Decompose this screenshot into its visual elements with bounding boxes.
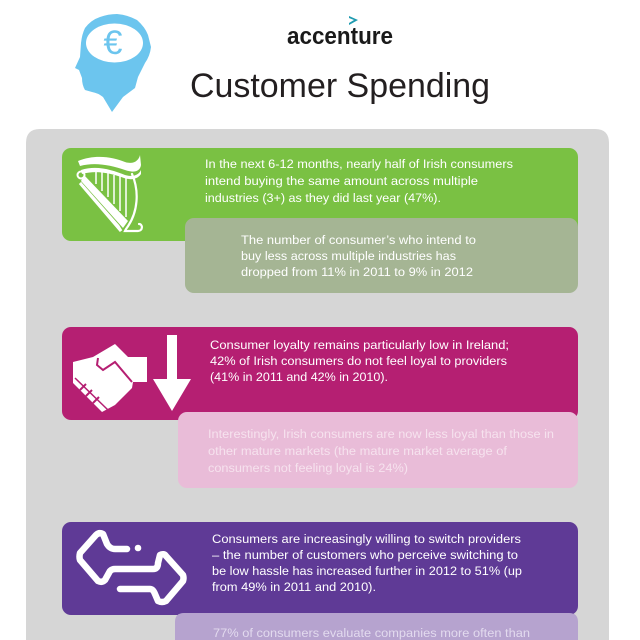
logo: accenture: accenture — [287, 23, 393, 50]
panel: magenta loyalty — [62, 327, 578, 420]
text: magenta panel: Consumer loyalty remains particularly low in Ireland; — [210, 338, 509, 352]
text: sage callout: buy less across multiple industries has — [241, 249, 456, 263]
panel: lilac callout — [175, 613, 578, 640]
text: magenta panel: 42% of Irish consumers do not feel loyal to providers — [210, 354, 507, 368]
text: green panel: intend buying the same amount across multiple — [205, 174, 478, 188]
icon: switching arrows — [80, 533, 184, 602]
icon: handshake — [73, 344, 147, 412]
text: pink callout: other mature markets (the mature market average of — [208, 444, 508, 458]
panel: pink callout — [178, 412, 578, 488]
text: magenta panel: (41% in 2011 and 42% in 2010). — [210, 370, 388, 384]
panel: sage callout — [185, 218, 578, 293]
panel: green buying intentions — [62, 148, 578, 241]
text: purple panel: be low hassle has increased further in 2012 to 51% (up — [212, 564, 522, 578]
panel: purple switching — [62, 522, 578, 615]
text: lilac callout: 77% of consumers evaluate companies more often than — [213, 626, 530, 640]
text: purple panel: – the number of customers who perceive switching to — [212, 548, 518, 562]
text: sage callout: dropped from 11% in 2011 to 9% in 2012 — [241, 265, 473, 279]
icon: head with euro: € — [104, 24, 123, 62]
text: green panel: In the next 6-12 months, nearly half of Irish consumers — [205, 157, 513, 171]
text: purple panel: Consumers are increasingly willing to switch providers — [212, 532, 521, 546]
text: pink callout: consumers not feeling loyal is 24%) — [208, 461, 408, 475]
icon: down arrow — [153, 335, 191, 411]
text: purple panel: from 49% in 2011 and 2010). — [212, 580, 376, 594]
text: pink callout: Interestingly, Irish consumers are now less loyal than those in — [208, 427, 554, 441]
text: green panel: industries (3+) as they did last year (47%). — [205, 191, 441, 205]
icon: harp — [78, 155, 142, 231]
panel: grey background — [26, 129, 609, 640]
text: sage callout: The number of consumer’s who intend to — [241, 233, 476, 247]
icon: head with euro — [75, 14, 151, 112]
title: Customer Spending — [190, 67, 490, 105]
